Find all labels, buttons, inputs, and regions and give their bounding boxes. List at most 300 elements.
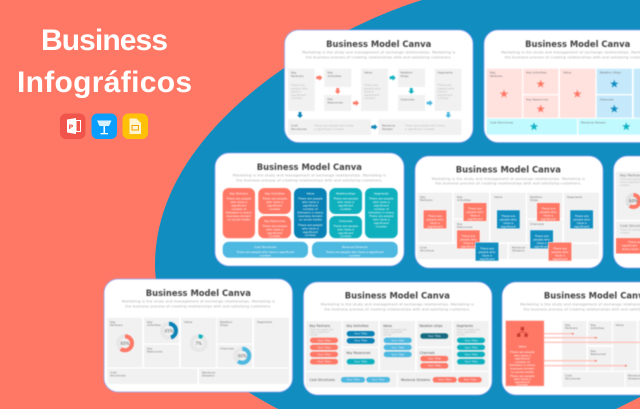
sticky note text: significant xyxy=(480,257,495,261)
coloured card text: who have a xyxy=(373,200,390,204)
canvas body text: number xyxy=(364,96,376,100)
canvas body text: people who xyxy=(438,86,454,90)
canvas labels: Cost xyxy=(420,246,427,250)
pill labels xyxy=(318,332,478,382)
card title: Business Model Canva xyxy=(326,39,431,49)
coloured card text: who have a xyxy=(266,200,283,204)
canvas labels: Value xyxy=(184,320,192,324)
canvas boxes xyxy=(107,318,289,384)
sticky note text: There are xyxy=(552,246,567,250)
pill labels: Your Title xyxy=(354,360,367,364)
coloured card text: There are people xyxy=(261,196,287,200)
coloured card text: There are people xyxy=(297,223,323,227)
canvas labels: Relation xyxy=(530,195,542,199)
coloured card text: who have a xyxy=(337,228,354,232)
coral note: every busin xyxy=(622,247,639,251)
coloured card text: significant xyxy=(267,231,283,235)
title: Business xyxy=(41,24,168,57)
card title: Business Model Canva xyxy=(257,162,362,172)
donut chart: 45%: 45% xyxy=(165,328,174,333)
donut chart: 7%: 7% xyxy=(196,341,202,346)
canvas labels: Value xyxy=(383,324,392,328)
pill labels: Your Title xyxy=(438,378,451,382)
flow arrows xyxy=(297,75,451,130)
sticky note text: have a xyxy=(463,241,473,245)
panel: canvas with stars xyxy=(484,30,640,142)
canvas labels: Segments xyxy=(567,195,582,199)
canvas labels: Structures xyxy=(110,374,126,378)
key partners box: number xyxy=(620,184,629,187)
canvas small description: There are people who xyxy=(310,328,334,332)
card description: Marketing is the study and management of exchange relationships. Marketing is xyxy=(432,177,585,181)
sticky note text: significant xyxy=(541,217,557,221)
pills xyxy=(310,331,485,382)
coloured card text: significant xyxy=(338,204,354,208)
coloured card text: who have a xyxy=(302,200,319,204)
canvas labels: Key xyxy=(147,320,153,324)
canvas labels xyxy=(565,323,640,380)
canvas labels xyxy=(310,324,473,382)
value callout: Value xyxy=(518,344,526,348)
panel: canvas with value callout xyxy=(502,282,640,395)
canvas labels: Resources xyxy=(147,350,163,354)
pill labels: Your Title xyxy=(391,345,404,349)
canvas body text: significant xyxy=(291,93,307,97)
canvas labels: Channels xyxy=(420,351,435,355)
coloured card text: number xyxy=(269,234,281,238)
canvas small description xyxy=(310,328,481,336)
cost structure box: number xyxy=(620,232,629,234)
canvas labels: Ships xyxy=(220,323,229,327)
canvas labels: Value xyxy=(616,323,624,327)
coloured card text: business domain xyxy=(227,214,251,218)
coloured card text: on social media xyxy=(299,218,322,222)
canvas labels: Partners xyxy=(291,74,304,78)
canvas labels: Key xyxy=(110,320,116,324)
sticky note text: There are xyxy=(427,214,442,218)
coloured card text: There are people xyxy=(226,196,251,200)
value callout xyxy=(506,321,544,386)
canvas labels: Channels xyxy=(400,98,415,102)
donut chart: 60% light blue xyxy=(235,349,249,363)
pill labels: Your Title xyxy=(318,338,331,342)
canvas labels: Key xyxy=(590,349,596,353)
pill labels: Your Title xyxy=(318,352,331,356)
canvas body text: There are people who have xyxy=(404,124,445,128)
canvas body text: There are xyxy=(290,83,305,87)
sticky notes xyxy=(423,203,593,261)
pill labels: Your Title xyxy=(465,352,478,356)
canvas small description: number xyxy=(310,334,318,336)
coloured card text: There are people who have a significant xyxy=(235,250,295,254)
panel: canvas with arrows xyxy=(284,30,473,142)
canvas labels: Activities xyxy=(590,326,605,330)
panel: canvas with coloured cards xyxy=(215,153,404,266)
canvas labels: Streams xyxy=(512,248,525,252)
canvas labels: Value xyxy=(364,70,372,74)
donut chart: 60% light blue: 60% xyxy=(238,353,247,358)
coloured card text: number of xyxy=(303,207,319,211)
sticky note text: have a xyxy=(577,221,587,225)
canvas boxes xyxy=(417,193,599,259)
coloured card text: number of xyxy=(231,207,247,211)
canvas body text: a significant number xyxy=(314,127,345,131)
coloured card text: who have a xyxy=(373,218,390,222)
sticky note text: significant xyxy=(574,224,590,228)
sticky note text: have a xyxy=(503,221,513,225)
sticky note text: There are xyxy=(460,234,475,238)
canvas small description: have a significant xyxy=(383,331,403,334)
canvas body text: number xyxy=(291,96,303,100)
sticky note text: people who xyxy=(479,250,496,254)
coloured card text: number of xyxy=(374,207,390,211)
pill labels: Your Title xyxy=(354,339,367,343)
coloured card text: There are people xyxy=(368,214,394,218)
card title: Business Model Canva xyxy=(146,288,251,298)
canvas labels: Revenue xyxy=(382,124,395,128)
coloured card text: who have a xyxy=(337,200,354,204)
canvas labels xyxy=(110,320,272,378)
coloured card text: There are people xyxy=(368,196,394,200)
canvas labels: Channels xyxy=(220,346,234,350)
sticky note text: significant xyxy=(461,244,477,248)
canvas labels: Ships xyxy=(400,74,409,78)
tinted box labels: Value xyxy=(563,70,571,74)
canvas labels: Key xyxy=(291,70,297,74)
sticky note text: people who xyxy=(540,210,557,214)
canvas labels xyxy=(420,195,582,252)
coloured card text: Value xyxy=(306,192,314,196)
coloured card text: significant xyxy=(303,204,319,208)
canvas labels: Revenue Streams xyxy=(401,378,430,382)
canvas small description: number xyxy=(383,334,392,336)
canvas labels: Structure xyxy=(420,248,434,252)
card description xyxy=(520,303,640,311)
sticky note text: people who xyxy=(533,238,550,242)
canvas boxes xyxy=(306,321,489,387)
canvas labels: Key xyxy=(328,97,333,101)
tinted box labels: Key xyxy=(490,70,496,74)
pill labels: Your Title xyxy=(465,360,478,364)
coloured card text: Key Activities xyxy=(265,192,285,196)
sticky note text: people who xyxy=(460,238,477,242)
coloured card text: Relationships xyxy=(336,192,356,196)
canvas body text: significant xyxy=(364,93,380,97)
sticky note text: There are xyxy=(467,206,482,210)
pill labels: Your Title xyxy=(372,378,385,382)
canvas labels: Revenue xyxy=(202,370,215,374)
card description: the business process of creating relationships with and satisfying customers. xyxy=(324,307,470,311)
tinted box labels xyxy=(490,70,621,124)
pill labels: Your Title xyxy=(464,378,477,382)
donut chart: 60%: 60% xyxy=(629,198,638,204)
sticky note text: have a xyxy=(482,254,492,258)
canvas labels: Partners xyxy=(110,323,123,327)
icon: PowerPoint xyxy=(60,114,86,139)
canvas boxes xyxy=(562,321,640,387)
coloured card text: significant xyxy=(231,204,247,208)
value callout: number xyxy=(517,382,529,386)
canvas labels: Segments xyxy=(257,320,272,324)
donut chart: 60% xyxy=(118,336,132,350)
sticky note text: people who xyxy=(552,250,569,254)
coloured card text: followers in every xyxy=(297,210,323,214)
sticky note text: people who xyxy=(467,210,484,214)
pill labels: Your Title xyxy=(391,352,404,356)
card description xyxy=(122,300,275,308)
pill labels: Your Title xyxy=(318,345,331,349)
card description xyxy=(501,51,640,60)
canvas labels: Partners xyxy=(420,198,433,202)
sticky note text xyxy=(427,206,590,261)
card title: Business Model Canva xyxy=(525,39,630,49)
card description: the business process of creating relationships with and satisfying customers. xyxy=(306,56,452,60)
card description: the business process of creating relationships with and satisfying customers. xyxy=(435,182,581,186)
canvas labels: Ships xyxy=(530,198,539,202)
value callout: on social media xyxy=(511,370,534,374)
donut chart: 45% xyxy=(162,324,176,338)
coloured card text: number xyxy=(305,233,317,237)
card description: the business process of creating relationships with and satisfying customers. xyxy=(236,178,382,182)
canvas small description: have a significant xyxy=(456,331,476,334)
canvas labels: Partners xyxy=(565,326,578,330)
canvas labels: Cost xyxy=(110,370,117,374)
canvas small description: There are people who xyxy=(456,328,481,332)
canvas labels: Key Activities xyxy=(346,324,369,328)
donut chart: 60%: 60% xyxy=(121,341,130,346)
icon: hierarchy xyxy=(517,327,528,337)
canvas small description: There are people who xyxy=(383,328,407,332)
card description xyxy=(302,51,455,60)
sticky note text: significant xyxy=(534,244,550,248)
tinted box labels: Revenue Stream xyxy=(581,120,606,124)
value callout: number of xyxy=(515,360,531,364)
coloured cards xyxy=(223,188,398,258)
coloured card text: who have a xyxy=(302,226,319,230)
canvas labels: Cost Structures xyxy=(310,378,335,382)
panel: canvas with pills xyxy=(304,282,492,395)
canvas body text: people who xyxy=(364,86,381,90)
canvas body text: number xyxy=(438,96,450,100)
canvas labels: Value xyxy=(494,195,502,199)
canvas small description: number xyxy=(456,334,465,336)
value callout: There are people xyxy=(509,350,535,354)
canvas labels: Key xyxy=(457,195,463,199)
coral note xyxy=(616,238,640,254)
donut chart: 7% xyxy=(192,336,206,350)
sticky note text: people who xyxy=(573,218,590,222)
canvas labels: Activities xyxy=(457,198,471,202)
pill labels: Your Title xyxy=(391,338,404,342)
sticky note text: significant xyxy=(428,224,443,228)
canvas labels: Revenue xyxy=(512,246,525,250)
canvas labels: Segments xyxy=(456,324,473,328)
coloured card text: number xyxy=(349,254,361,258)
background: blue curved shape xyxy=(155,0,640,409)
canvas labels: Key Resources xyxy=(346,351,371,355)
coloured card text: Segments xyxy=(374,192,389,196)
coloured card text: followers in every xyxy=(368,210,394,214)
coloured card text: Channels xyxy=(339,219,353,223)
sticky note text: have a xyxy=(430,221,440,225)
coloured card text: There are people xyxy=(332,224,358,228)
coloured card text: who have a xyxy=(266,228,283,232)
tinted box labels: Channels xyxy=(600,98,614,102)
tinted box labels: Partners xyxy=(490,74,503,78)
canvas body text: There are people who have xyxy=(313,124,354,128)
card description xyxy=(321,303,474,311)
pill labels: Your Title xyxy=(428,334,441,338)
canvas labels: Cost xyxy=(291,124,298,128)
card description: Marketing is the study and management of exchange relationships. Marketing is xyxy=(233,174,386,178)
canvas labels: Stream xyxy=(382,127,393,131)
pill labels: Your Title xyxy=(318,360,331,364)
card description: Marketing is the study and management of exchange relationships. Marketing is xyxy=(122,300,275,304)
title xyxy=(17,24,192,99)
sticky note text: significant xyxy=(468,217,483,221)
sticky note text: people who xyxy=(427,218,444,222)
title: Infográficos xyxy=(17,66,192,99)
sticky note text: people who xyxy=(500,218,517,222)
card description: the business process of creating relationships with and satisfying customers. xyxy=(125,304,271,308)
canvas labels: Segments xyxy=(438,70,453,74)
canvas labels: Key xyxy=(457,222,463,226)
card description: Marketing is the study and management of exchange relationships. Marketing is xyxy=(302,51,455,55)
canvas labels: Resources xyxy=(328,100,343,104)
pill labels: Your Title xyxy=(428,357,441,361)
card title: Business Model Canva xyxy=(456,164,561,174)
canvas labels: Relation ships xyxy=(420,324,443,328)
coloured card text: There are people xyxy=(261,224,287,228)
canvas labels: Activities xyxy=(328,74,342,78)
coloured card text: Cost Structures xyxy=(254,245,277,249)
canvas labels: Relation xyxy=(220,320,232,324)
icon: PowerPoint: P xyxy=(68,123,74,131)
sticky note text: have a xyxy=(543,214,553,218)
value callout: business domain xyxy=(510,366,535,370)
canvas labels: Key Partners xyxy=(310,324,331,328)
coloured card text: on social media xyxy=(227,218,250,222)
canvas body text: There are xyxy=(436,83,452,87)
coloured card text: There are people who have a significant xyxy=(325,250,385,254)
coloured card text: number xyxy=(260,254,272,258)
canvas small description: have a significant xyxy=(310,331,329,334)
tinted box labels: Cost Structures xyxy=(490,120,514,124)
coral note: significant xyxy=(622,244,638,248)
coloured card text: Revenue Streams xyxy=(342,245,368,249)
coloured card text xyxy=(226,192,394,258)
coloured card text: business domain xyxy=(298,214,323,218)
canvas labels: Resources xyxy=(590,352,606,356)
canvas labels: Cost xyxy=(565,374,572,378)
panel: canvas with donut charts xyxy=(104,279,292,392)
sticky note text: There are xyxy=(500,214,515,218)
sticky note text: There are xyxy=(574,214,589,218)
sticky note text: have a xyxy=(537,241,547,245)
tinted box labels: Relation Ships xyxy=(600,70,621,74)
coloured card text: There are people xyxy=(297,196,323,200)
value callout: who have a xyxy=(514,353,531,357)
pill labels: Your Title xyxy=(347,378,360,382)
canvas labels: Key xyxy=(565,323,571,327)
canvas body text: There are xyxy=(363,83,378,87)
tinted box labels: Key Activities xyxy=(526,70,547,74)
coloured card text: number xyxy=(340,234,352,238)
sticky note text: There are xyxy=(479,246,494,250)
connector arrows xyxy=(544,333,640,367)
sticky note text: There are xyxy=(540,206,555,210)
coloured card text: number xyxy=(340,207,352,211)
tinted box labels: Key Resources xyxy=(526,98,548,102)
pill labels: Your Title xyxy=(428,364,441,368)
pill labels: Your Title xyxy=(465,345,478,349)
coloured card text: number xyxy=(376,224,388,228)
value callout: followers in every xyxy=(509,363,535,367)
canvas labels: Streams xyxy=(202,374,215,378)
canvas labels: Key xyxy=(420,195,426,199)
canvas labels: Structures xyxy=(291,127,307,131)
canvas body text: people who xyxy=(291,86,308,90)
icon: Google Slides xyxy=(122,114,148,139)
value callout: who have a xyxy=(514,377,531,381)
card title: Business Model Canva xyxy=(345,291,450,301)
canvas labels: Key xyxy=(590,323,596,327)
card description: Marketing is the study and management of exchange relationships. Marketing is xyxy=(321,303,474,307)
canvas labels: Channels xyxy=(530,222,544,226)
coloured card text: Key Resources xyxy=(264,219,286,223)
coloured card text: followers in every xyxy=(226,210,252,214)
canvas labels xyxy=(291,70,453,131)
value callout: There are people xyxy=(509,374,535,378)
canvas labels: Structures xyxy=(565,376,581,380)
canvas labels: Key xyxy=(147,346,153,350)
cost structure box xyxy=(616,222,640,238)
canvas body text: significant xyxy=(438,93,453,97)
key partners box xyxy=(616,172,640,220)
pill labels: Your Title xyxy=(465,338,478,342)
canvas labels: Activities xyxy=(147,323,161,327)
coloured card text: There are people xyxy=(332,196,358,200)
canvas body text: have a xyxy=(364,90,374,94)
tinted boxes xyxy=(487,69,640,135)
canvas body text xyxy=(290,83,454,131)
pill labels: Your Title xyxy=(354,332,367,336)
coloured card text: significant xyxy=(374,221,390,225)
card description xyxy=(432,177,585,186)
sticky note text: have a xyxy=(555,254,565,258)
value callout: significant xyxy=(515,357,531,361)
canvas boxes xyxy=(288,69,461,135)
canvas labels: Key xyxy=(328,70,333,74)
coloured card text: Key Partners xyxy=(230,192,248,196)
coloured card text: significant xyxy=(374,204,390,208)
coloured card text: significant xyxy=(267,204,283,208)
canvas labels: Relation xyxy=(400,70,413,74)
coloured card text: number xyxy=(269,207,281,211)
coloured card text: who have a xyxy=(230,200,247,204)
sticky note text: There are xyxy=(534,234,549,238)
sticky note text: have a xyxy=(470,214,480,218)
star icons xyxy=(500,80,630,130)
panel: canvas with overlapping notes xyxy=(415,156,603,268)
canvas body text: a significant number xyxy=(405,127,436,131)
icon: Keynote xyxy=(92,114,117,139)
canvas labels: Resources xyxy=(457,225,473,229)
panel: cropped canvas at right edge xyxy=(614,156,640,268)
sticky note text: significant xyxy=(553,257,568,261)
value callout: significant xyxy=(515,380,531,384)
coloured card text: significant xyxy=(303,230,319,234)
